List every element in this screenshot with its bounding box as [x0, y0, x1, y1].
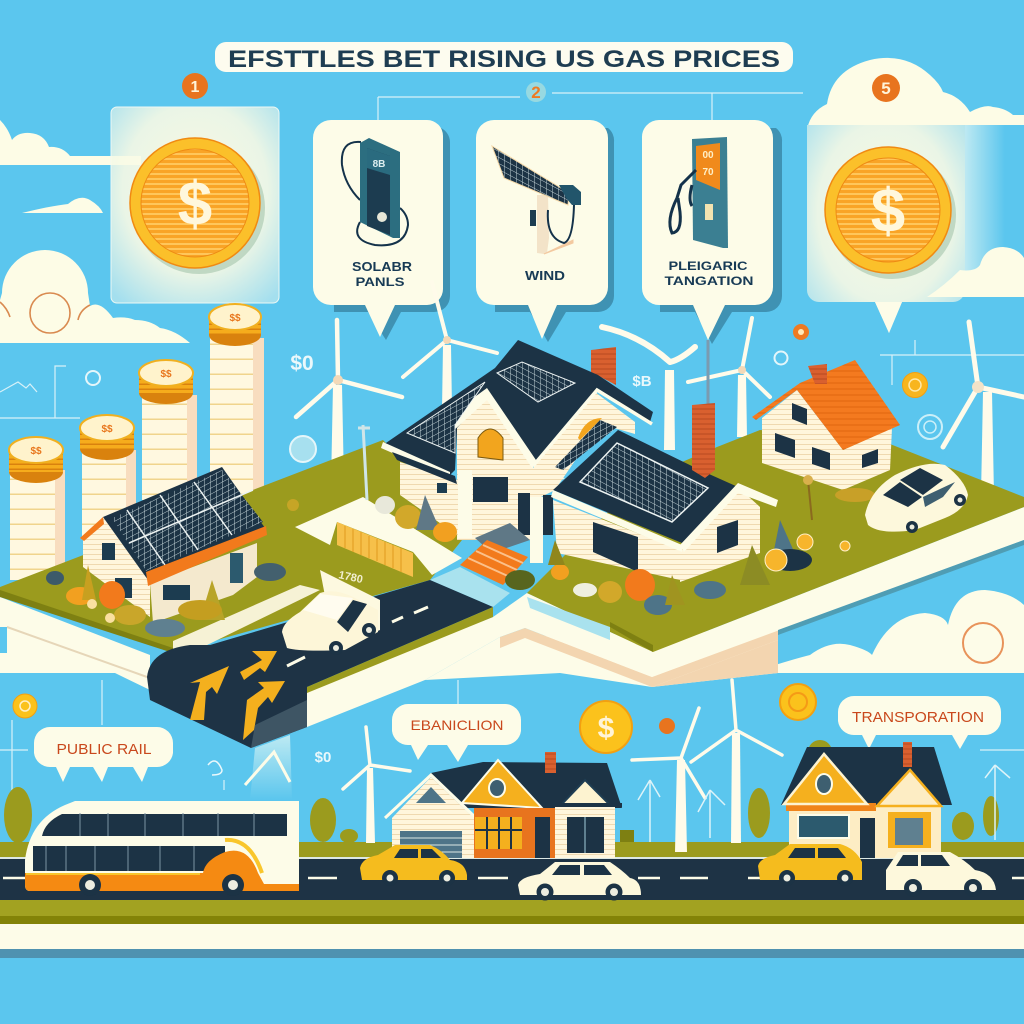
arched window [478, 429, 503, 460]
card: wind: WIND [525, 269, 565, 283]
cloud: right of panel 5 [927, 247, 1024, 297]
stack 3 [139, 360, 197, 500]
right upper wall [533, 392, 635, 500]
lower cloud circle accent [963, 623, 1003, 663]
lower panel sky separator and landscape [0, 740, 1024, 958]
lower trees [4, 740, 999, 843]
turbine B [403, 282, 497, 410]
card: electric transportation [642, 120, 782, 344]
back roof [383, 340, 653, 475]
road marking text: 1780 [337, 569, 364, 586]
icon: fuel pump: 70 [702, 167, 714, 178]
green verge upper [0, 842, 1024, 858]
card: solar panels [313, 120, 450, 340]
badge 1 [182, 73, 208, 99]
sky decorative lines [0, 93, 1024, 835]
green verge lower [0, 900, 1024, 916]
turbine 2 [632, 708, 705, 852]
small sky icons: $0 [290, 352, 314, 375]
parked white pickup on road [282, 570, 380, 655]
bubble: education [392, 704, 521, 762]
icon: solar panel on pole [492, 146, 581, 254]
cars on street [360, 844, 996, 900]
turbine E [943, 322, 1024, 496]
main house [381, 340, 778, 585]
stack 1: $$ [30, 446, 42, 457]
bubble: transportation: TRANSPORATION [852, 709, 984, 726]
lower coins: $ [598, 712, 615, 745]
bubble: public rail [34, 727, 173, 782]
badge 2: 2 [531, 83, 541, 102]
windows [593, 522, 638, 572]
platform cream base left [0, 597, 150, 690]
stack 1 [9, 437, 65, 580]
turbine D [602, 327, 695, 450]
fence [337, 522, 413, 577]
turbine 3 [691, 680, 782, 843]
lower coins: $0 [315, 749, 331, 766]
panel 1: coin [111, 73, 279, 303]
front gable [457, 395, 533, 490]
right wing solar [580, 443, 708, 522]
cream band [0, 924, 1024, 949]
right lawn [527, 430, 1024, 652]
title [215, 42, 793, 73]
dollar coin [825, 147, 956, 279]
orange roof house [752, 360, 900, 520]
card: solar panels: PANLS [356, 275, 404, 289]
back chimney [591, 347, 616, 385]
isometric platform [0, 430, 1024, 800]
stack 2: $$ [101, 424, 113, 435]
small tree [808, 480, 812, 520]
road arrows [190, 651, 285, 740]
main house garden [375, 495, 850, 615]
icon: fuel pump [670, 137, 728, 248]
panel 5: coin [807, 58, 1024, 333]
light beam under road [250, 735, 292, 800]
bus [25, 801, 299, 896]
cloud circle accent [0, 293, 90, 333]
card: solar panels: SOLABR [352, 260, 412, 274]
clouds: upper sky [0, 120, 190, 343]
badge 2 [526, 82, 546, 102]
porch [473, 477, 508, 502]
white car 2 [886, 852, 996, 897]
dollar coin [130, 138, 265, 274]
dollar coin: $ [871, 177, 905, 246]
bubble: transportation [838, 696, 1001, 749]
road [147, 580, 493, 748]
left wing wall [400, 462, 457, 535]
bubble: education: EBANICLION [410, 717, 504, 733]
left lawn [0, 440, 470, 650]
orange steps [460, 540, 528, 585]
lower house left [385, 752, 634, 858]
card: wind [476, 120, 614, 342]
turbine C [688, 318, 770, 437]
turbine A [296, 320, 402, 485]
stack 4 [209, 304, 264, 503]
badge 5: 5 [881, 79, 891, 98]
white car 1 [518, 862, 641, 900]
garden [46, 499, 299, 637]
bubble: public rail: PUBLIC RAIL [56, 741, 152, 758]
card: electric transportation: TANGATION [664, 274, 754, 288]
electric car [865, 464, 968, 533]
lower front wall [457, 468, 537, 540]
lamp post [358, 425, 370, 500]
dollar coin: $ [178, 170, 212, 239]
lower right cloud [750, 590, 1024, 673]
card: electric transportation: PLEIGARIC [668, 259, 748, 273]
title: EFSTTLES BET RISING US GAS PRICES [228, 46, 780, 73]
coin stacks [9, 304, 264, 580]
walkway [295, 497, 462, 575]
lower coins [13, 684, 816, 785]
icon: charger [342, 138, 408, 245]
small sky icons: $B [632, 373, 652, 390]
lower house right [781, 742, 952, 858]
turbine 1 [343, 727, 410, 843]
top roof solar panels [497, 362, 575, 402]
light blue tile strip [527, 597, 610, 640]
chimney [706, 340, 710, 405]
yellow car 2 [758, 844, 862, 886]
icon: charger: 8B [373, 159, 385, 170]
stack 4: $$ [229, 313, 241, 324]
small solar house [46, 467, 299, 637]
stack 2 [80, 415, 136, 540]
right wing wall [553, 500, 680, 580]
road lane marks [287, 607, 428, 666]
badge 5 [872, 74, 900, 102]
lower turbines [343, 680, 1010, 852]
wind turbines behind houses [296, 282, 1024, 496]
road [0, 858, 1024, 900]
distant turbines [638, 765, 1010, 842]
shadow band [0, 949, 1024, 958]
small sky icons [86, 324, 942, 462]
platform cream base centre [425, 630, 778, 687]
yellow car 1 [360, 845, 467, 886]
stack 3: $$ [160, 369, 172, 380]
badge 1: 1 [191, 79, 200, 96]
icon: fuel pump: 00 [702, 150, 714, 161]
